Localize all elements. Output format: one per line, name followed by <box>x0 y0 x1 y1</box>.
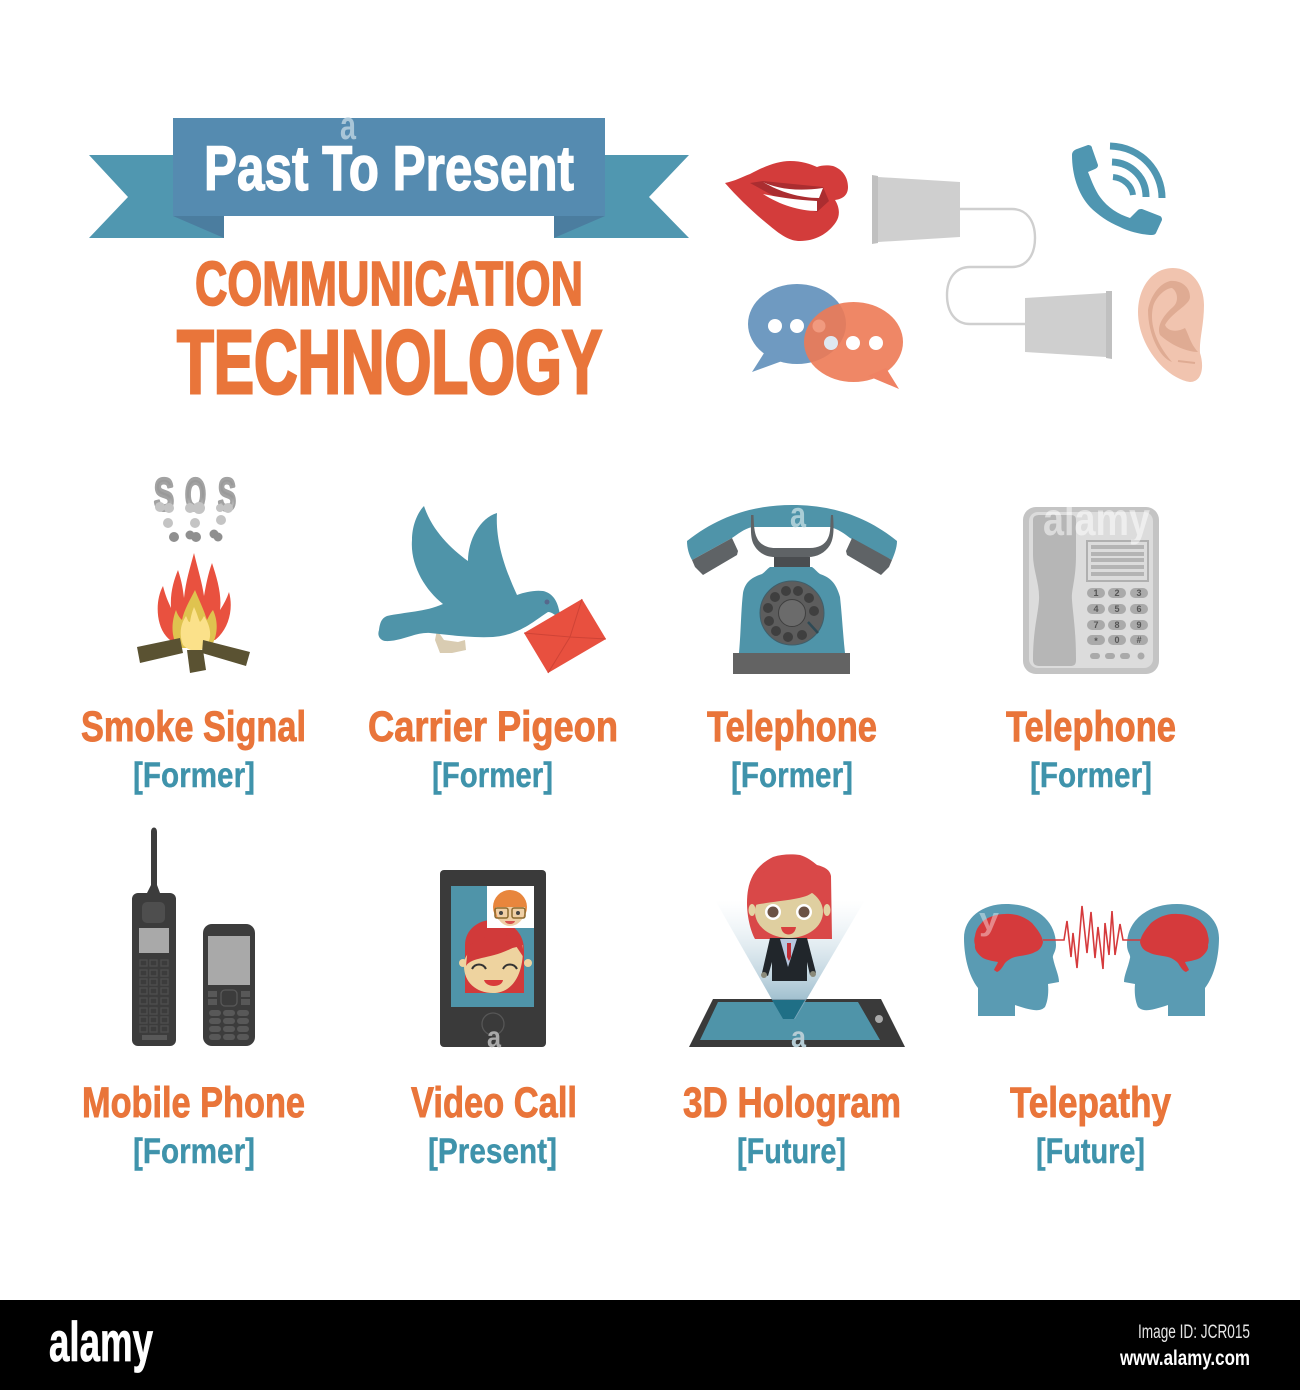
heading: communication technology <box>177 250 602 413</box>
label: 3D hologram: [Future] <box>737 1132 846 1171</box>
icon: office desk telephone: 5 <box>1114 604 1120 614</box>
smoke SOS letters <box>154 469 236 520</box>
label: telephone desk <box>1006 703 1176 795</box>
icon: office desk telephone: 7 <box>1093 620 1099 630</box>
label: telephone desk: [Former] <box>1030 756 1152 795</box>
label: telephone desk: Telephone <box>1006 703 1176 751</box>
icon: office desk telephone <box>1023 493 1159 674</box>
label: telephone rotary <box>707 703 877 795</box>
icon: office desk telephone: 4 <box>1093 604 1099 614</box>
label: telepathy: Telepathy <box>1010 1079 1171 1127</box>
icon: office desk telephone: 1 <box>1093 588 1099 598</box>
left head <box>964 901 1059 1016</box>
icon: office desk telephone: 0 <box>1114 635 1120 645</box>
icon: red lips <box>725 161 848 241</box>
brain wave <box>1043 906 1141 969</box>
label: telephone rotary: [Former] <box>731 756 853 795</box>
label: mobile phone: Mobile Phone <box>82 1079 305 1127</box>
icon: ear <box>1138 268 1204 382</box>
icon: office desk telephone: # <box>1136 635 1142 645</box>
label: mobile phone <box>82 1079 305 1171</box>
label: carrier pigeon: Carrier Pigeon <box>368 703 618 751</box>
icon: speech bubbles <box>748 284 903 389</box>
icon: mobile phones <box>132 828 255 1046</box>
label: smoke signal <box>81 703 306 795</box>
label: smoke signal: [Former] <box>133 756 255 795</box>
title ribbon: a <box>340 104 357 148</box>
label: video call: [Present] <box>428 1132 557 1171</box>
icon: rotary telephone: a <box>790 494 807 535</box>
image id: Image ID: JCR015 <box>1138 1322 1250 1343</box>
icon: office desk telephone: 2 <box>1114 588 1120 598</box>
label: telepathy <box>1010 1079 1171 1171</box>
icon: office desk telephone: alamy <box>1043 493 1150 545</box>
icon: video call tablet <box>440 870 546 1054</box>
website: www.alamy.com <box>1119 1347 1250 1370</box>
left head: y <box>979 901 999 937</box>
label: smoke signal: Smoke Signal <box>81 703 306 751</box>
footer logo: alamy <box>49 1310 153 1373</box>
icon: office desk telephone: 3 <box>1136 588 1142 598</box>
label: mobile phone: [Former] <box>133 1132 255 1171</box>
icon: office desk telephone: 6 <box>1136 604 1142 614</box>
icon: phone with signal waves <box>1072 145 1162 235</box>
heading: communication technology: TECHNOLOGY <box>177 313 602 413</box>
label: telephone rotary: Telephone <box>707 703 877 751</box>
heading: communication technology: COMMUNICATION <box>195 250 583 319</box>
icon: tin can telephone <box>872 175 1112 359</box>
label: carrier pigeon: [Former] <box>432 756 553 795</box>
label: video call: Video Call <box>411 1079 577 1127</box>
icon: 3D hologram: a <box>791 1021 806 1054</box>
footer bar <box>0 1300 1300 1390</box>
smoke SOS letters: S <box>154 469 174 520</box>
icon: carrier pigeon with envelope <box>378 506 606 673</box>
right head <box>1124 904 1219 1016</box>
label: 3D hologram: 3D Hologram <box>683 1079 901 1127</box>
smoke SOS letters: S <box>218 469 236 520</box>
title ribbon <box>89 104 689 238</box>
icon: smoke signal and campfire <box>137 469 250 673</box>
label: carrier pigeon <box>368 703 618 795</box>
icon: office desk telephone: * <box>1094 636 1098 646</box>
label: telepathy: [Future] <box>1036 1132 1145 1171</box>
icon: 3D hologram <box>689 854 905 1054</box>
icon: office desk telephone: 9 <box>1136 620 1142 630</box>
icon: video call tablet: a <box>487 1021 501 1054</box>
label: video call <box>411 1079 577 1171</box>
icon: office desk telephone: 8 <box>1114 620 1120 630</box>
smoke SOS letters: O <box>185 469 206 520</box>
ribbon title text: Past To Present <box>204 134 574 204</box>
icon: telepathy heads <box>964 901 1219 1016</box>
label: 3D hologram <box>683 1079 901 1171</box>
icon: rotary telephone <box>687 494 897 674</box>
